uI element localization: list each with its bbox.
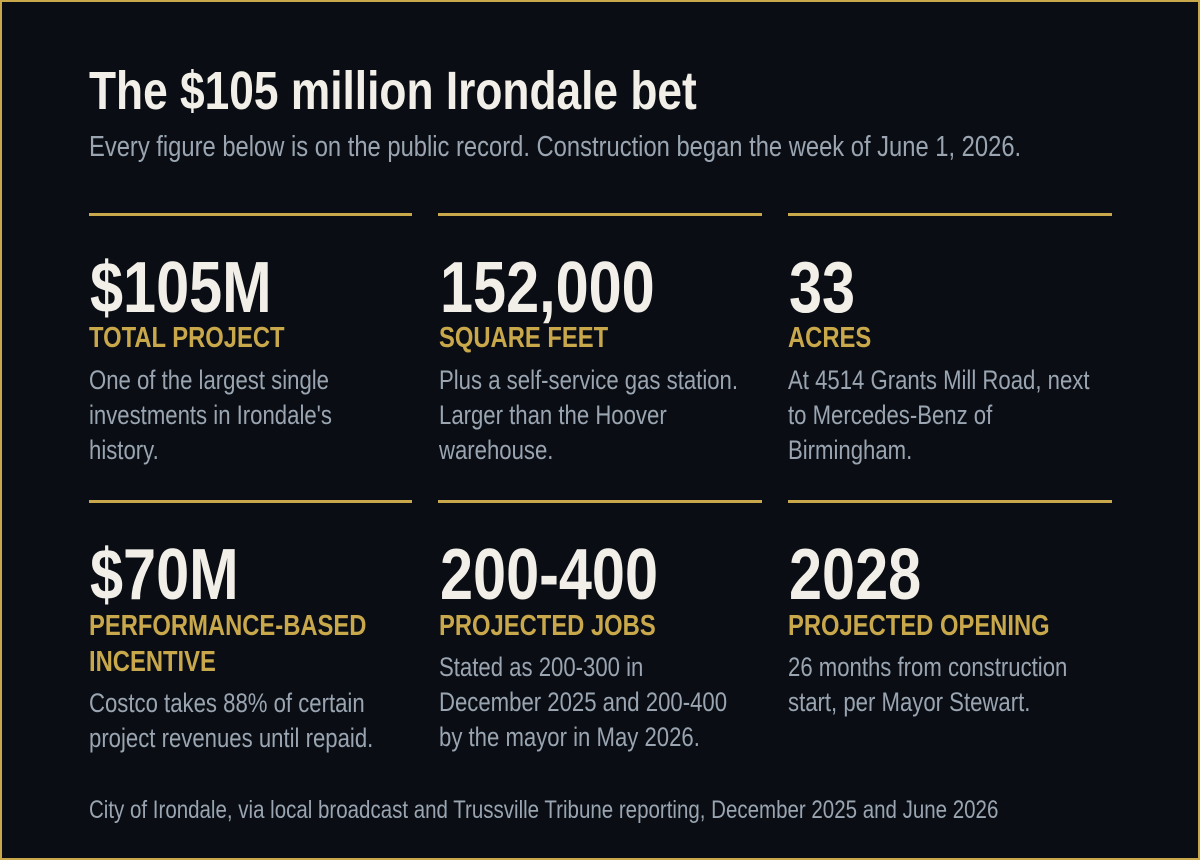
stat: 152,000: 152,000 — [440, 248, 654, 328]
label: performance-based incentive: PERFORMANCE-BASED — [89, 610, 366, 642]
title: The $105 million Irondale bet — [89, 61, 697, 121]
description: acres: Birmingham. — [788, 435, 912, 465]
description: projected opening: start, per Mayor Stewart. — [788, 687, 1030, 717]
description: acres: to Mercedes-Benz of — [788, 400, 992, 430]
description: acres: At 4514 Grants Mill Road, next — [788, 365, 1090, 395]
description: performance-based incentive: project revenues until repaid. — [89, 723, 373, 753]
description: performance-based incentive — [89, 688, 373, 753]
stat: 33: 33 — [789, 248, 855, 328]
label: square feet: SQUARE FEET — [439, 322, 608, 354]
panel: performance-based incentive — [89, 500, 412, 753]
source footnote: City of Irondale, via local broadcast and Trussville Tribune reporting, December 2025 and June 2026 — [89, 796, 998, 824]
description: total project: One of the largest single — [89, 365, 329, 395]
panel: projected jobs — [438, 500, 762, 752]
description: total project: investments in Irondale's — [89, 400, 332, 430]
description: square feet: warehouse. — [439, 435, 553, 465]
description: projected jobs — [439, 652, 727, 752]
label: acres: ACRES — [788, 322, 871, 354]
description: total project: history. — [89, 435, 159, 465]
description: square feet: Plus a self-service gas station. — [439, 365, 738, 395]
stat: $70M: $70M — [90, 535, 239, 615]
subtitle: Every figure below is on the public record. Construction began the week of June 1, 2026. — [89, 131, 1021, 163]
description: projected jobs: by the mayor in May 2026. — [439, 722, 700, 752]
description: acres — [788, 365, 1090, 465]
label: performance-based incentive: INCENTIVE — [89, 646, 216, 678]
panel: total project — [89, 213, 412, 465]
label: performance-based incentive — [89, 610, 366, 678]
description: projected jobs: December 2025 and 200-400 — [439, 687, 727, 717]
stat: 200-400: 200-400 — [440, 535, 658, 615]
description: square feet — [439, 365, 738, 465]
label: projected opening: PROJECTED OPENING — [788, 610, 1050, 642]
description: performance-based incentive: Costco takes 88% of certain — [89, 688, 365, 718]
description: projected jobs: Stated as 200-300 in — [439, 652, 643, 682]
description: total project — [89, 365, 332, 465]
description: projected opening — [788, 652, 1067, 717]
panel: acres — [788, 213, 1112, 465]
label: total project: TOTAL PROJECT — [89, 322, 285, 354]
description: projected opening: 26 months from construction — [788, 652, 1067, 682]
stat: $105M: $105M — [90, 248, 272, 328]
stat: 2028: 2028 — [789, 535, 921, 615]
label: projected jobs: PROJECTED JOBS — [439, 610, 655, 642]
description: square feet: Larger than the Hoover — [439, 400, 666, 430]
panel: square feet — [438, 213, 762, 465]
panel: projected opening — [788, 500, 1112, 717]
